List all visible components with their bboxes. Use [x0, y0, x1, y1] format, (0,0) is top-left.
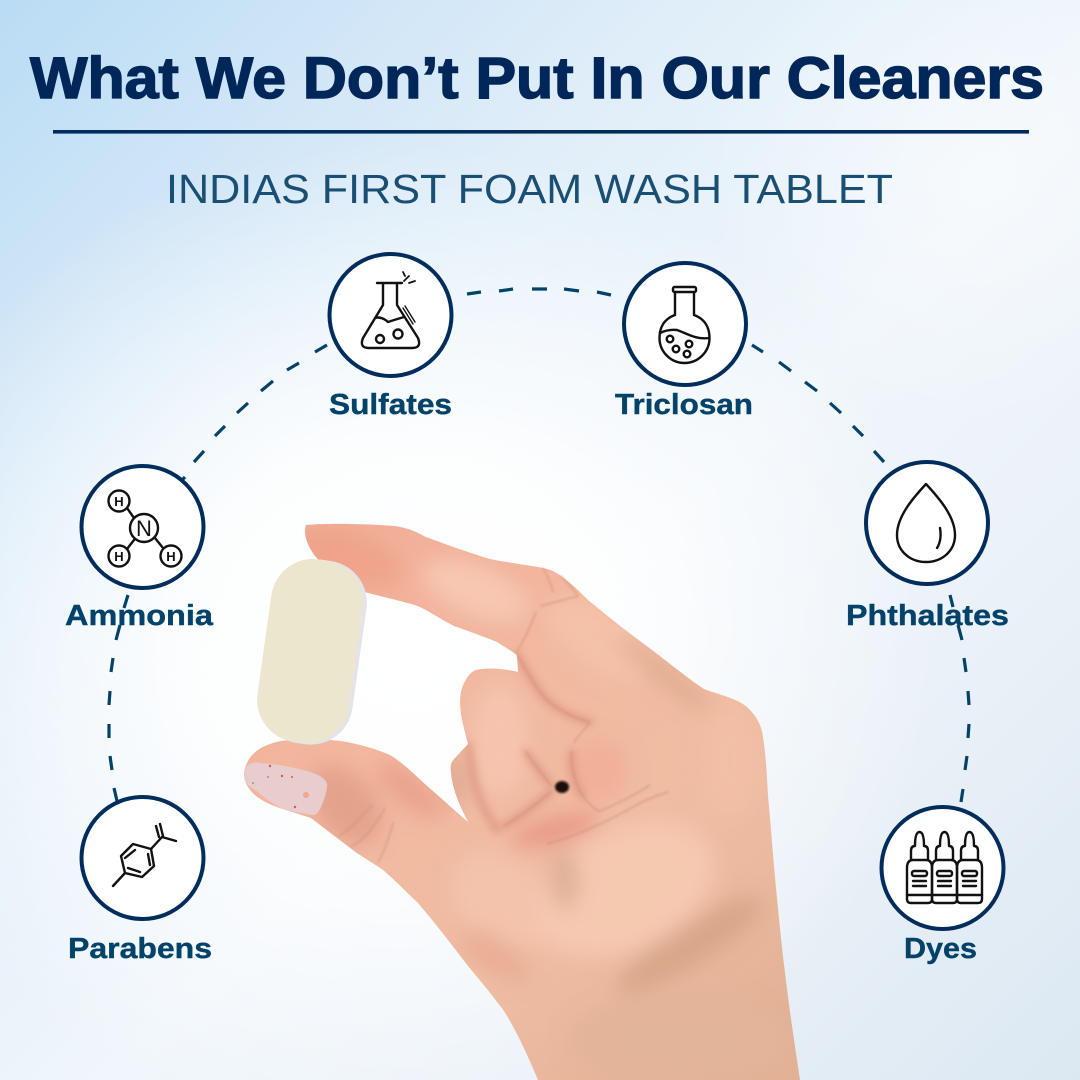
label: Parabens	[68, 933, 212, 965]
label: Triclosan	[615, 389, 753, 421]
icon: benzene ring molecule	[113, 824, 176, 886]
item: Triclosan	[615, 263, 753, 421]
title: What We Don’t Put In Our Cleaners	[30, 46, 1044, 111]
icon: ammonia molecule: N	[136, 516, 152, 541]
item: Ammonia	[65, 466, 214, 632]
finger creases	[340, 568, 668, 862]
item: Sulfates	[329, 254, 452, 421]
soft shadows between fingers	[468, 654, 590, 830]
icon: ammonia molecule	[108, 490, 182, 566]
icon: ammonia molecule: H	[114, 549, 124, 564]
label: Dyes	[904, 933, 977, 965]
hand holding tablet	[240, 515, 810, 1080]
dark gap in fist	[555, 781, 569, 793]
subtitle: INDIAS FIRST FOAM WASH TABLET	[166, 166, 893, 212]
icon: three dye bottles	[907, 832, 982, 903]
dashed arc connecting ingredients	[109, 289, 969, 802]
item: Phthalates	[846, 462, 1009, 632]
icon: ammonia molecule: H	[166, 549, 176, 564]
item: Parabens	[68, 797, 212, 965]
thumb nail	[244, 763, 327, 815]
label: Phthalates	[846, 600, 1009, 632]
title rule	[53, 130, 1029, 134]
icon: round flask	[660, 287, 710, 363]
item: Dyes	[882, 807, 1004, 965]
icon: conical flask	[362, 272, 419, 348]
tablet	[252, 553, 372, 750]
icon: drop	[897, 484, 955, 562]
label: Ammonia	[65, 600, 214, 632]
label: Sulfates	[329, 389, 452, 421]
icon: ammonia molecule: H	[114, 494, 124, 509]
